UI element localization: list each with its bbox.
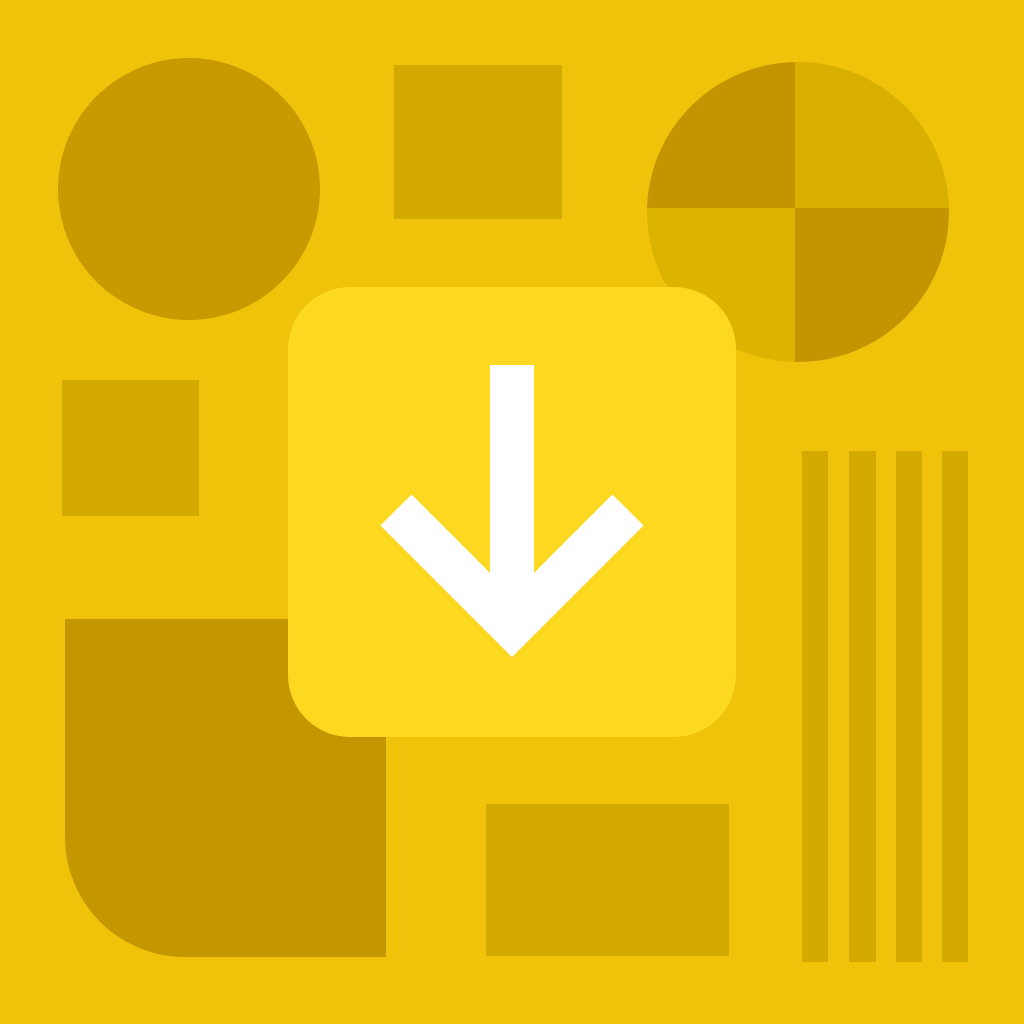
shape: top-left circle	[58, 58, 320, 320]
icon: down arrow	[380, 365, 644, 657]
shape: bottom rectangle	[486, 804, 729, 956]
shape: bottom-left block	[65, 619, 386, 957]
shape: top square	[394, 65, 562, 219]
icon: download button	[288, 287, 736, 737]
shape: small square	[62, 380, 199, 516]
shape: vertical bars	[802, 451, 968, 962]
shape: quartered circle	[647, 62, 949, 362]
